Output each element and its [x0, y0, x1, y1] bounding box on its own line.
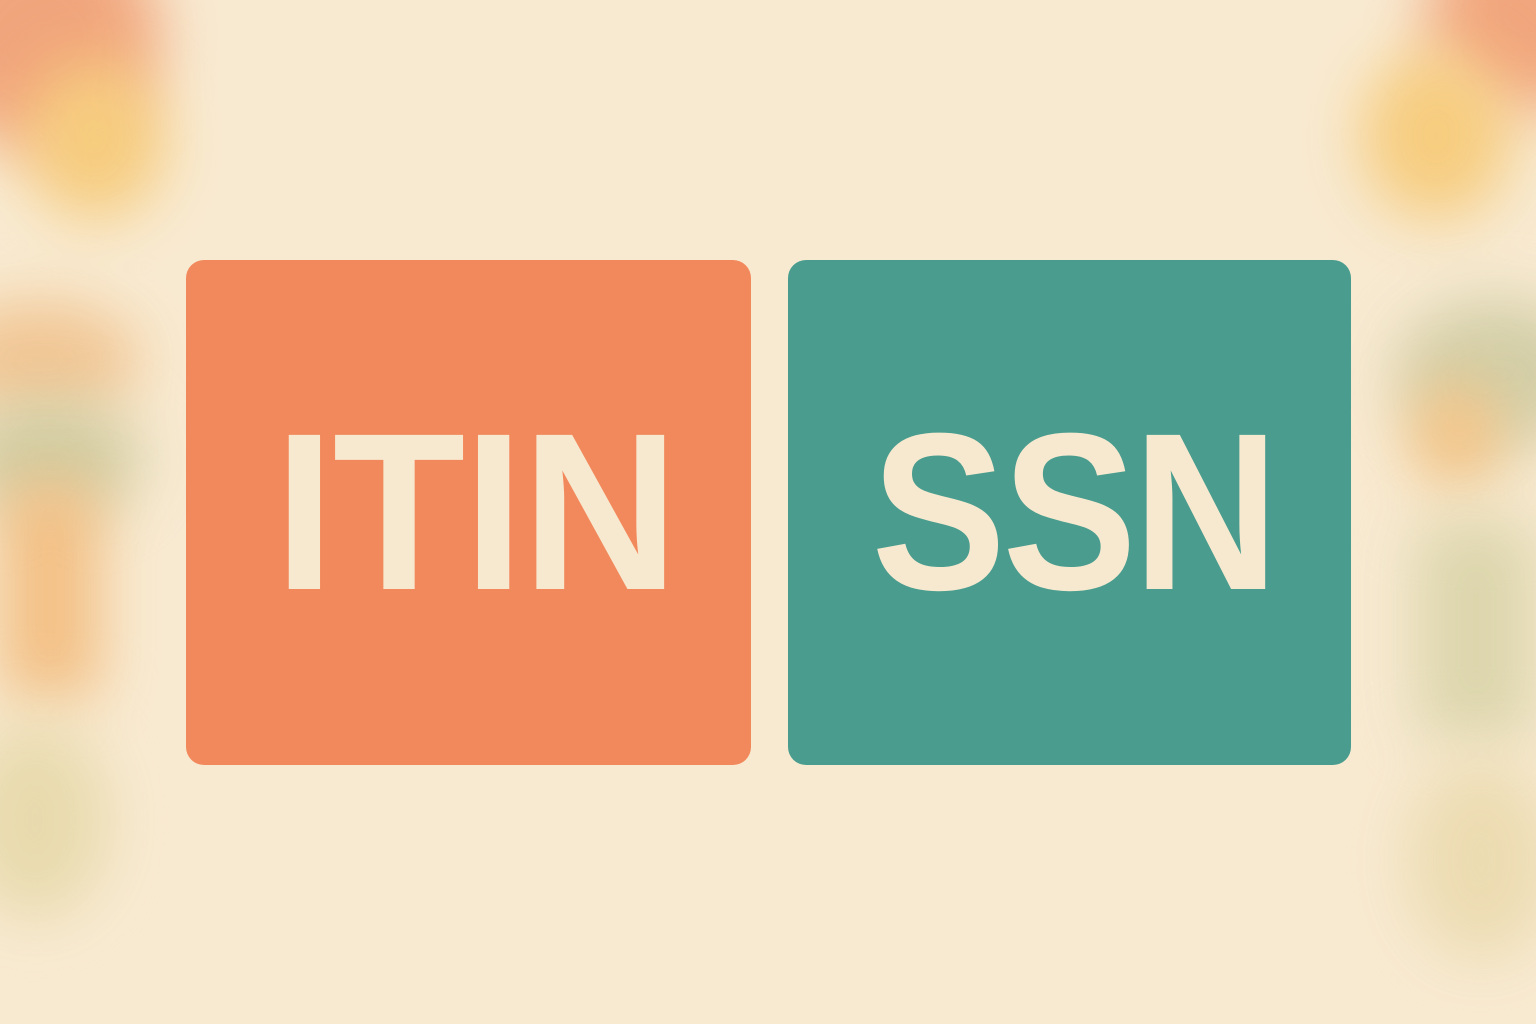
panel: ITIN box: ITIN — [274, 387, 677, 637]
panel: SSN box — [788, 260, 1351, 765]
panel: SSN box: SSN — [872, 387, 1275, 637]
decoration: left blurred edge — [0, 0, 199, 935]
decoration: right blurred edge — [1326, 0, 1536, 974]
panel: ITIN box — [186, 260, 751, 765]
